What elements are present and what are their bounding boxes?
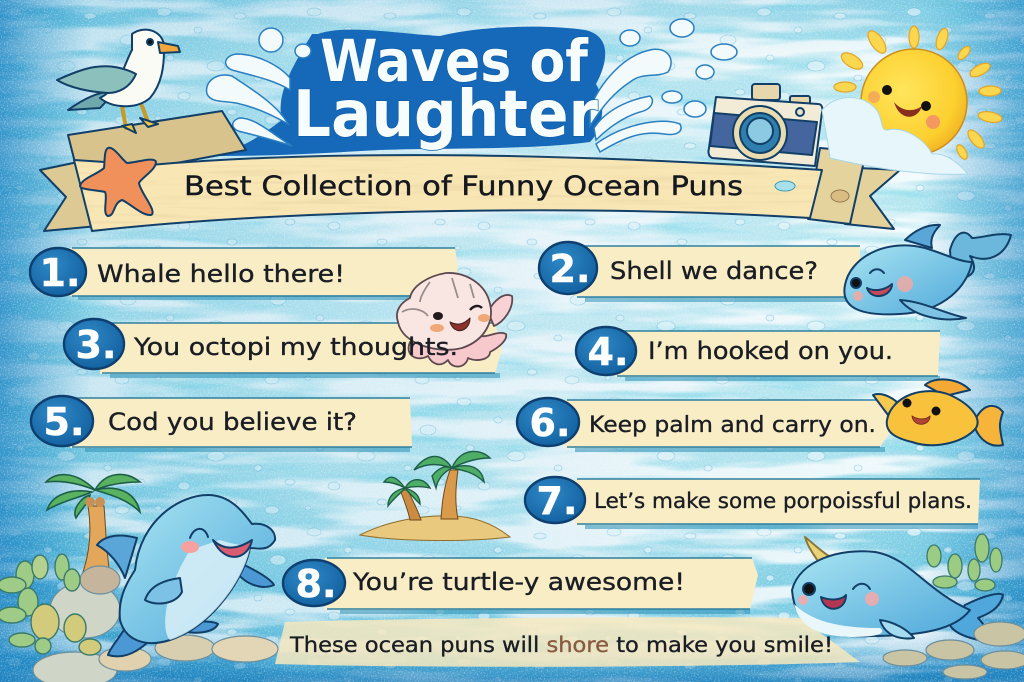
badge 3 [64, 319, 124, 369]
item 4 [576, 327, 940, 381]
closing message [275, 617, 860, 667]
pun 5: Cod you believe it? [108, 408, 357, 436]
badge 3: 3. [76, 323, 116, 367]
badge 5 [31, 396, 93, 446]
badge 7 [525, 477, 585, 523]
badge 2: 2. [550, 247, 590, 291]
title: Waves of Laughter [293, 27, 598, 152]
icon: goldfish [873, 379, 1003, 446]
item 1 [30, 248, 458, 300]
badge 4: 4. [588, 330, 628, 374]
item 5 [31, 396, 412, 452]
banner back plank left [68, 111, 246, 230]
plank 6 [565, 400, 895, 452]
pun 7: Let’s make some porpoissful plans. [594, 489, 972, 513]
badge 8: 8. [296, 562, 336, 606]
icon: clam shell character [397, 273, 512, 367]
banner heading text: Best Collection of Funny Ocean Puns [184, 171, 743, 202]
icon: seagull [57, 30, 180, 133]
title: Waves of Laughter: Laughter [293, 78, 598, 152]
badge 6: 6. [530, 401, 570, 445]
plank 2 [575, 246, 860, 302]
plank 3 [100, 323, 502, 378]
item 8 [283, 558, 758, 614]
title splash [207, 19, 737, 156]
seabed stones left [33, 566, 278, 682]
badge 5: 5. [44, 400, 84, 444]
pun 3: You octopi my thoughts. [133, 333, 458, 361]
badge 8 [283, 560, 345, 606]
icon: narwhal [792, 537, 1003, 642]
badge 6 [517, 398, 579, 446]
island sand [360, 516, 510, 541]
seabed stones right [883, 622, 1024, 679]
icon: smiling sun [822, 26, 1003, 174]
icon: camera [708, 84, 822, 166]
pun 4: I’m hooked on you. [648, 337, 893, 365]
sun rays [834, 26, 1003, 161]
plank 4 [615, 331, 940, 381]
title: Waves of Laughter: Waves of [320, 27, 589, 95]
badge 1 [30, 248, 86, 296]
item 7 [525, 477, 980, 529]
icon: whale [844, 225, 1011, 319]
icon: coral right [927, 534, 1002, 591]
banner back plank right [808, 148, 866, 224]
badge 4 [576, 327, 636, 375]
badge 1: 1. [40, 251, 80, 295]
banner left ribbon tail [40, 162, 98, 231]
item 6 [517, 398, 895, 452]
banner: Best Collection of Funny Ocean Puns [40, 111, 900, 231]
pun 6: Keep palm and carry on. [589, 413, 876, 438]
pun 2: Shell we dance? [610, 257, 818, 285]
icon: palm island [360, 451, 510, 541]
plank 1 [70, 248, 458, 300]
pun 1: Whale hello there! [97, 260, 345, 288]
banner right ribbon tail [845, 168, 900, 229]
icon: dolphin [97, 495, 275, 656]
icon: palm tree left [46, 474, 140, 575]
badge 7: 7. [537, 479, 577, 523]
item 3 plank and badge [64, 319, 502, 378]
closing plank [275, 617, 860, 667]
pun 8: You’re turtle-y awesome! [352, 568, 685, 596]
closing text: These ocean puns will shore to make you smile! [289, 633, 833, 657]
icon: starfish [80, 148, 156, 216]
item 2 [539, 242, 860, 302]
plank 7 [575, 479, 980, 529]
plank 8 [325, 558, 758, 614]
badge 2 [539, 242, 597, 294]
cloud [822, 97, 968, 174]
icon: coral left [0, 554, 101, 655]
palm fronds [384, 451, 490, 506]
banner main plank [74, 155, 822, 231]
plank 5 [70, 398, 412, 452]
